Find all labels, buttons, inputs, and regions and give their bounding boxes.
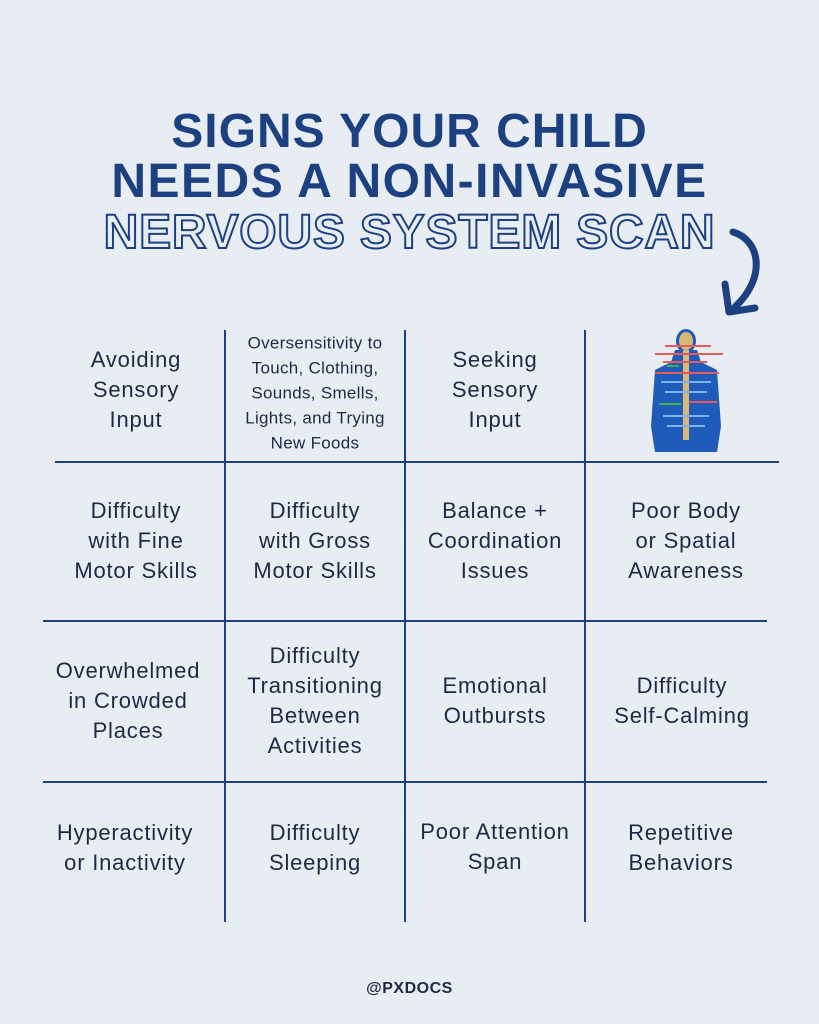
text: Span — [468, 849, 522, 874]
text: Issues — [461, 558, 529, 583]
title — [106, 105, 712, 250]
text: Overwhelmed — [56, 658, 200, 683]
text: with Gross — [259, 528, 371, 553]
text: Repetitive — [628, 820, 734, 845]
row 3 — [56, 643, 750, 758]
text: Lights, and Trying — [245, 408, 385, 428]
text: Seeking — [452, 347, 538, 372]
text: Balance + — [442, 498, 548, 523]
text: Awareness — [628, 558, 744, 583]
text: Sensory — [452, 377, 538, 402]
text: Hyperactivity — [57, 820, 193, 845]
icon: spine body scan — [651, 329, 723, 452]
text: Sleeping — [269, 850, 361, 875]
text: Input — [110, 407, 162, 432]
text: Sounds, Smells, — [251, 384, 379, 402]
text: Difficulty — [637, 673, 727, 698]
row 2 — [74, 498, 744, 583]
text: Emotional — [442, 673, 548, 698]
text: Motor Skills — [74, 558, 198, 583]
text: Difficulty — [270, 498, 360, 523]
text: Between — [269, 703, 361, 728]
text: with Fine — [88, 528, 184, 553]
text: Sensory — [93, 377, 179, 402]
text: Touch, Clothing, — [252, 358, 378, 378]
arrow — [722, 228, 760, 316]
text: Places — [93, 718, 163, 743]
text: Poor Attention — [420, 819, 570, 844]
text: Behaviors — [628, 850, 734, 875]
row 4 — [57, 819, 734, 875]
text: Transitioning — [247, 673, 383, 698]
grid lines — [43, 330, 779, 922]
text: Oversensitivity to — [248, 334, 382, 352]
text: Self-Calming — [614, 703, 750, 728]
text: Input — [469, 407, 521, 432]
text: or Inactivity — [64, 850, 186, 875]
text: Difficulty — [91, 498, 181, 523]
text: Poor Body — [631, 498, 741, 523]
text: Motor Skills — [253, 558, 377, 583]
text: Difficulty — [270, 643, 360, 668]
title: SIGNS YOUR CHILD — [171, 105, 648, 158]
text: Coordination — [428, 528, 562, 553]
text: New Foods — [271, 434, 359, 452]
text: Activities — [268, 733, 362, 758]
text: or Spatial — [636, 528, 736, 553]
text: Outbursts — [444, 703, 546, 728]
row 1 — [90, 334, 538, 452]
text: Avoiding — [91, 347, 181, 372]
text: in Crowded — [68, 688, 188, 713]
footer handle: @PXDOCS — [366, 980, 453, 997]
text: Difficulty — [270, 820, 360, 845]
title: NEEDS A NON-INVASIVE — [111, 155, 708, 208]
